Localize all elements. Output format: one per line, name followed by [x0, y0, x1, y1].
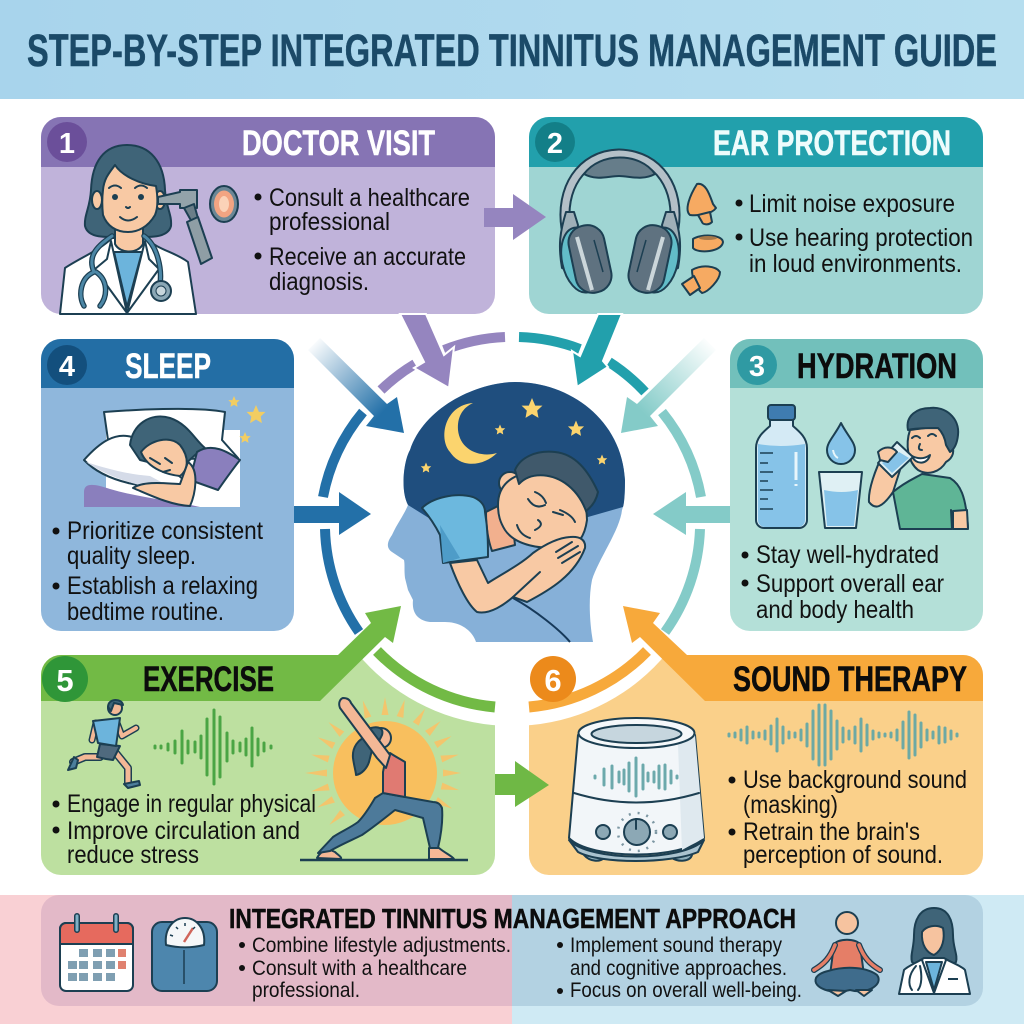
bullets: doctor visit: Consult a healthcare [269, 184, 470, 212]
bullets: sleep [52, 517, 263, 626]
arrow: blue diagonal to head [308, 338, 404, 433]
header banner [0, 0, 1024, 99]
bottom summary band [0, 895, 1024, 1024]
arrow: light teal diagonal to head [621, 338, 716, 433]
heading: sleep: SLEEP [125, 347, 211, 386]
bullets: approach right: and cognitive approaches. [570, 957, 787, 980]
icon: teal sound wave [729, 705, 957, 765]
bullets: exercise: reduce stress [67, 841, 199, 869]
icon: sun and yoga pose [300, 697, 468, 860]
icon: earplugs [682, 184, 723, 295]
icon: crescent moon [444, 403, 497, 464]
bullets: hydration [742, 541, 944, 624]
bullets: approach left: Combine lifestyle adjustments. [252, 934, 511, 957]
bullets: exercise: Improve circulation and [67, 817, 300, 845]
heading: hydration: HYDRATION [797, 347, 957, 386]
central head illustration [388, 382, 625, 642]
bullets: sleep: Establish a relaxing [67, 572, 258, 600]
icon: calendar [60, 916, 133, 991]
bullets: doctor visit: Receive an accurate [269, 243, 466, 271]
arrow: green from exercise panel [300, 606, 401, 701]
sleeping man [422, 452, 598, 642]
arrow: purple down to head [400, 314, 454, 388]
panel: 6 sound therapy [529, 655, 983, 875]
bullets: sleep: Prioritize consistent [67, 517, 263, 545]
icon: weighing scale [152, 918, 217, 991]
bullets: sound therapy: (masking) [743, 791, 838, 819]
step number 1: 1 [59, 128, 75, 160]
step number 3 [737, 345, 777, 385]
icon: white noise machine [569, 718, 704, 861]
icon: meditating person [814, 912, 880, 996]
icon: headphones [556, 154, 684, 296]
bullets: hydration: Support overall ear [756, 570, 944, 598]
bullets: doctor visit [254, 184, 470, 296]
bullets: sound therapy: perception of sound. [743, 841, 943, 869]
icon: green sound wave [155, 710, 271, 784]
icon: water drop and glass [819, 423, 862, 528]
bullets: sleep: quality sleep. [67, 542, 196, 570]
bullets: approach left: professional. [252, 979, 360, 1002]
arrow: blue from sleep panel [294, 492, 371, 535]
heading: exercise: EXERCISE [143, 660, 274, 699]
arrow: green from exercise to sound therapy [495, 761, 549, 807]
panel: 2 ear protection [529, 117, 983, 314]
bullets: hydration: and body health [756, 596, 914, 624]
bullets: approach left [239, 934, 511, 1002]
heading: doctor visit: DOCTOR VISIT [242, 124, 435, 163]
bullets: approach right: Implement sound therapy [570, 934, 782, 957]
bullets: exercise: Engage in regular physical [67, 790, 316, 818]
flow ring arcs [323, 337, 701, 707]
bullets: approach left: Consult with a healthcare [252, 957, 467, 980]
central ring clearing [311, 324, 713, 726]
icon: runner [68, 700, 140, 788]
bullets: ear protection [736, 190, 973, 278]
panel: 5 exercise [41, 655, 495, 875]
bullets: exercise [52, 790, 316, 869]
step number 6 [530, 656, 576, 702]
bullets: sleep: bedtime routine. [67, 598, 224, 626]
panel: 1 doctor visit [41, 117, 495, 314]
panel: 4 sleep [41, 339, 294, 631]
arrow: light teal from hydration panel [653, 492, 730, 535]
bullets: ear protection: Use hearing protection [749, 224, 973, 252]
bullets: sound therapy: Use background sound [743, 766, 967, 794]
bullets: approach right [557, 934, 802, 1002]
step number 2: 2 [547, 128, 563, 160]
step number 4: 4 [59, 351, 75, 383]
arrow: purple from doctor visit to ear protection [484, 194, 546, 240]
heading: ear protection: EAR PROTECTION [713, 124, 951, 163]
icon: water bottle [756, 405, 807, 528]
bullets: sound therapy: Retrain the brain's [743, 818, 920, 846]
heading: integrated approach: INTEGRATED TINNITUS MANAGEMENT APPROACH [229, 903, 796, 934]
bullets: ear protection: in loud environments. [749, 250, 962, 278]
icon: stars [421, 398, 607, 472]
bullets: approach right: Focus on overall well-being. [570, 979, 802, 1002]
bullets: sound therapy [728, 766, 967, 869]
icon: doctor [899, 908, 970, 994]
bullets: ear protection: Limit noise exposure [749, 190, 955, 218]
bullets: doctor visit: diagnosis. [269, 268, 369, 296]
icon: man drinking water [869, 408, 968, 529]
step number 4 [47, 345, 87, 385]
icon: doctor with otoscope [60, 145, 238, 314]
arrow: orange from sound therapy panel [623, 606, 725, 701]
step number 1 [47, 122, 87, 162]
step number 2 [535, 122, 575, 162]
step number 5 [42, 656, 88, 702]
arrow: teal down to head [572, 314, 622, 387]
icon: sleeping woman [84, 396, 266, 507]
step number 6: 6 [544, 663, 562, 698]
step number 5: 5 [56, 663, 74, 698]
bullets: doctor visit: professional [269, 208, 390, 236]
panel: 3 hydration [730, 339, 983, 631]
bullets: hydration: Stay well-hydrated [756, 541, 939, 569]
step number 3: 3 [749, 351, 765, 383]
